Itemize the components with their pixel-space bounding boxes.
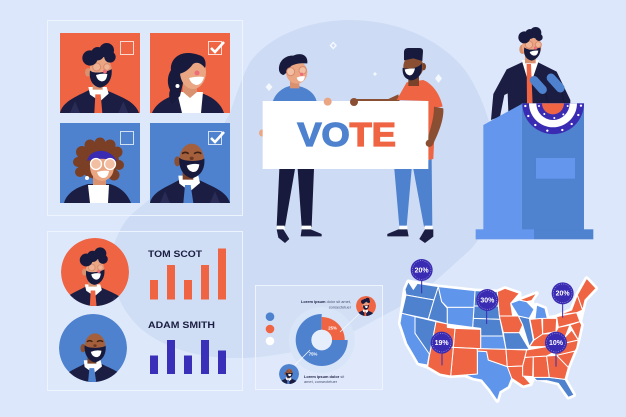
legend dots <box>266 312 274 345</box>
candidate card: woman <box>150 33 230 113</box>
label: Adam Smith: ADAM SMITH <box>148 320 215 331</box>
candidate card: curly haired woman <box>60 123 140 203</box>
pin: 10% southeast <box>545 332 567 367</box>
map outline <box>400 278 596 401</box>
donut chart: 75% <box>309 352 317 356</box>
pin: 10% southeast: 10% <box>549 340 564 347</box>
pin: 20% west <box>411 259 433 293</box>
usa map <box>400 259 596 401</box>
callout text: top: Lorem ipsum dolor sit amet, <box>301 299 351 304</box>
avatar: top callout <box>355 296 376 317</box>
bar chart: Tom Scot <box>150 248 226 300</box>
callout text: bottom: Lorem ipsum dolor sit <box>304 374 344 379</box>
vote sign <box>263 101 428 169</box>
microphones <box>528 72 566 103</box>
bunting <box>522 103 584 134</box>
avatar: Tom Scot <box>61 238 129 306</box>
illustration: speaker at podium <box>476 27 593 239</box>
sparkles <box>266 42 442 91</box>
bar chart: Adam Smith <box>150 340 226 374</box>
panel: donut chart <box>256 286 382 390</box>
pin: 20% northeast: 20% <box>556 291 570 298</box>
speaker <box>491 27 570 120</box>
candidate card: bald man <box>150 123 230 203</box>
pin: 20% west: 20% <box>415 267 429 274</box>
avatar: bottom callout <box>279 364 299 384</box>
podium <box>476 103 593 239</box>
label: Tom Scot: TOM SCOT <box>148 249 202 260</box>
pin: 30% north: 30% <box>480 297 495 304</box>
illustration: two people holding vote sign <box>259 48 443 243</box>
vote lettering: VOTE <box>297 117 396 154</box>
pin: 19% southwest: 19% <box>435 340 449 347</box>
pin: 20% northeast <box>552 282 574 318</box>
background blob <box>111 20 497 358</box>
avatar: Adam Smith <box>59 314 127 383</box>
panel: candidates grid <box>48 20 242 216</box>
states <box>400 278 596 401</box>
candidate card: bearded man <box>60 33 140 113</box>
panel: candidate comparison <box>48 232 242 390</box>
person left <box>259 54 322 243</box>
person right <box>353 48 443 243</box>
donut chart <box>296 314 348 366</box>
pin: 19% southwest <box>431 332 453 365</box>
donut chart: 25% <box>328 326 337 330</box>
hands on sign <box>324 98 433 147</box>
callout text: bottom: amet, consectetuer <box>304 379 338 384</box>
callout text: top: consectetuer <box>329 304 352 310</box>
pin: 30% north <box>476 289 498 324</box>
